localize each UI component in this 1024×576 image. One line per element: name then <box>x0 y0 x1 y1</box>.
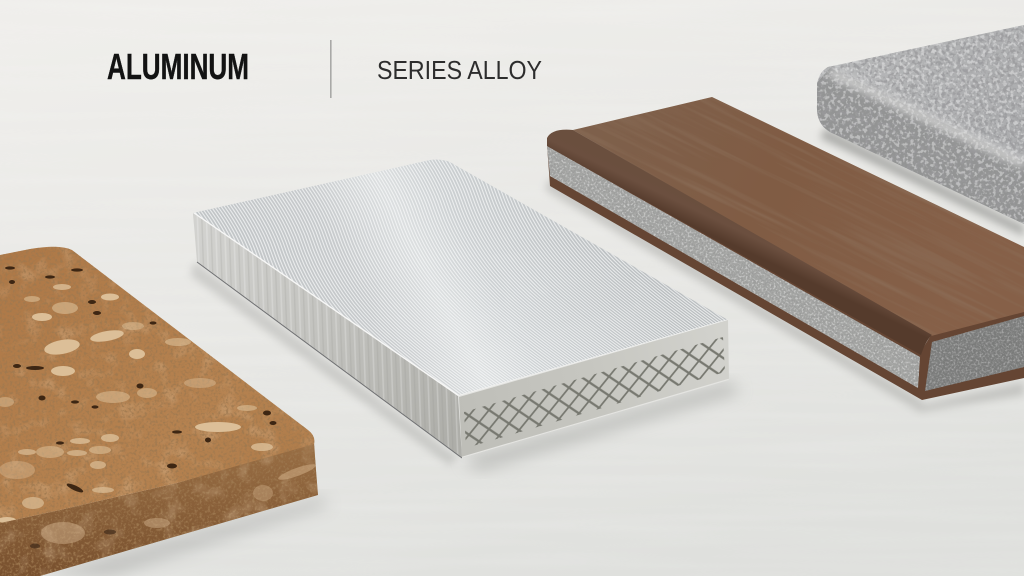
granite slab: upper right <box>810 20 1024 230</box>
aluminum sample: centre block <box>193 160 729 458</box>
subtitle: series alloy: SERIES ALLOY <box>377 57 542 85</box>
aluminum end face with diamond knurl <box>455 318 731 462</box>
aluminum left side face <box>193 213 462 458</box>
wood and granite sandwich sample: right centre <box>547 97 1024 400</box>
wood veneer base edging <box>547 145 1024 400</box>
wood top face with grain <box>573 97 1024 336</box>
cork side face <box>0 442 318 576</box>
granite core side <box>547 146 920 388</box>
cork sample: lower left <box>0 240 330 576</box>
cork top face with flecks and pores <box>0 240 330 530</box>
granite core end <box>925 316 1024 391</box>
shadows under samples <box>40 128 1024 576</box>
title: aluminum: ALUMINUM <box>107 46 249 87</box>
rounded wood front lip <box>547 130 932 355</box>
aluminum top face with wave engraving <box>193 160 728 396</box>
divider <box>330 40 332 98</box>
